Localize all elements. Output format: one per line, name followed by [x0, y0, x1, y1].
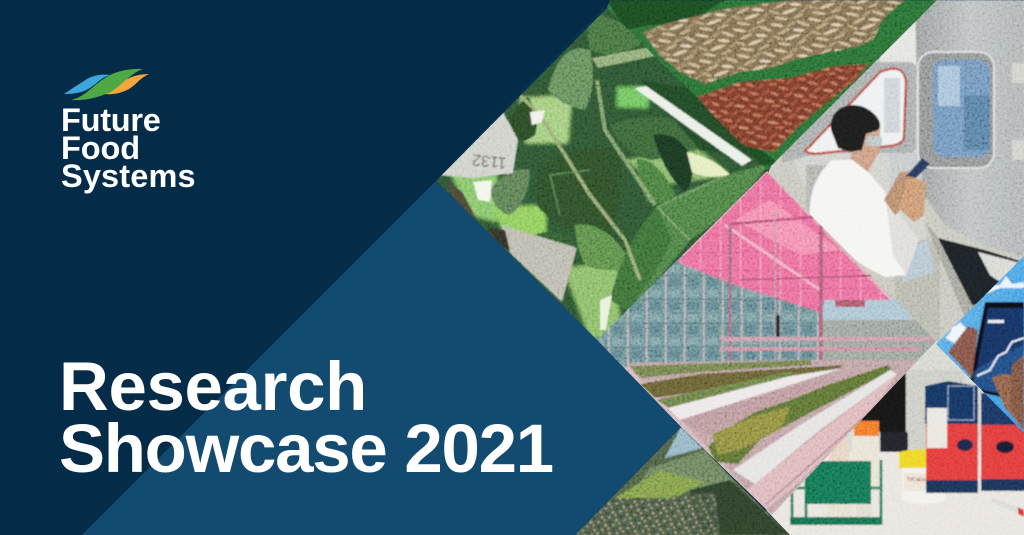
photo: lab bench with samples and oat milk cartons — [765, 335, 1024, 535]
photo: tan and red grain samples — [600, 0, 945, 175]
title: Research Showcase 2021: Research — [59, 348, 367, 425]
photo: plant leaves: 1132 — [471, 150, 507, 171]
photo: lab bench with samples and oat milk cartons: TriCalcium — [907, 477, 931, 483]
title: Research Showcase 2021 — [59, 348, 553, 487]
bright background between leaves — [430, 0, 775, 345]
photo: greenhouse with pink shade screens and lettuce rows — [590, 165, 940, 520]
logo wordmark: Food — [61, 130, 140, 166]
photo: aerial view of town and hills — [575, 427, 790, 535]
photographic grain overlay — [436, 0, 1024, 535]
logo icon: three coloured waves — [64, 69, 149, 100]
logo wordmark: Future — [61, 102, 161, 138]
logo wordmark: Systems — [61, 158, 196, 194]
lighter blue triangular panel — [82, 181, 681, 535]
title: Research Showcase 2021: Showcase 2021 — [59, 410, 553, 487]
photo: researcher at stainless steel vessel — [760, 0, 1024, 350]
logo: Future Food Systems — [61, 69, 196, 194]
logo wordmark — [61, 102, 196, 194]
photo: plant leaves — [430, 0, 775, 345]
photo: stock chart on phone held in hands — [936, 256, 1024, 433]
